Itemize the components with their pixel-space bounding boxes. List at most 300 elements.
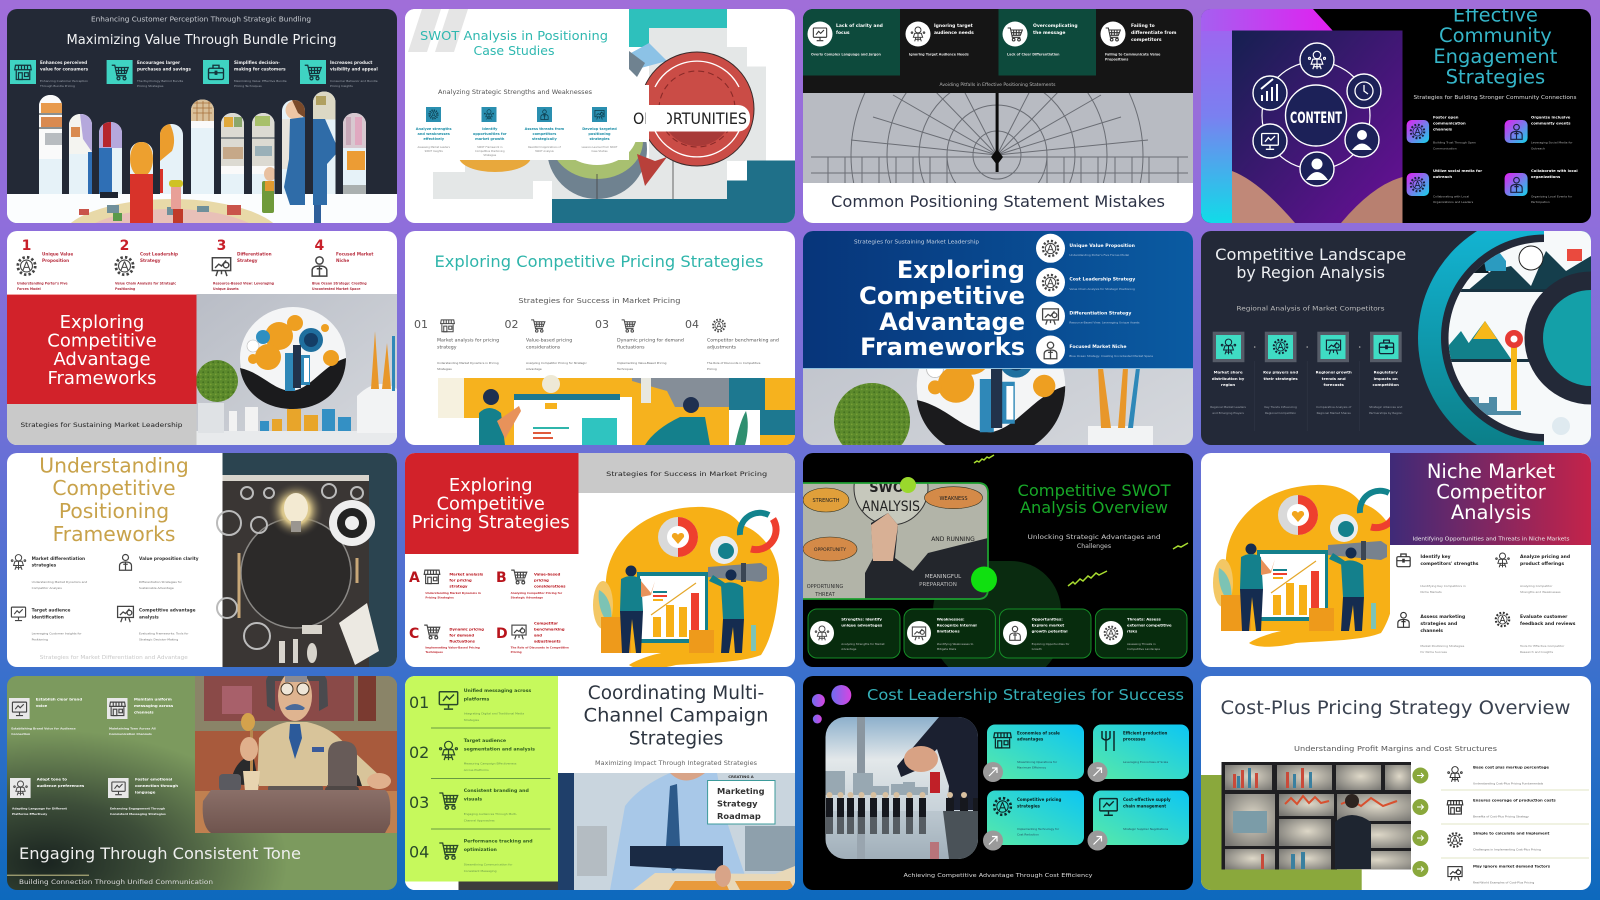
lime channel list panel: platforms — [464, 696, 490, 702]
illustration: protractor chart — [803, 93, 1193, 183]
step labels: Market analysis for pricing — [437, 338, 499, 344]
pricing captions: Implementing Value-Based Pricing — [425, 646, 480, 650]
framework labels: Cost Leadership Strategy — [1069, 276, 1135, 282]
analysis captions: Identifying Key Competitors in — [1420, 584, 1465, 588]
framework icons — [18, 257, 327, 276]
framework captions: Value Chain Analysis for Strategic Positioning — [1069, 287, 1135, 291]
four engagement items: Collaborating with Local — [1432, 194, 1469, 198]
title: Analysis Overview — [1019, 498, 1168, 517]
analysis labels: competitors' strengths — [1420, 561, 1478, 567]
region captions: and Emerging Players — [1212, 411, 1244, 415]
analysis labels: Identify key — [1420, 554, 1450, 560]
illustration: marketing roadmap photo — [558, 772, 795, 890]
title: Cost-Plus Pricing Strategy Overview — [1220, 698, 1570, 718]
illustration: SWOT photo: OPPORTUNING — [806, 584, 843, 590]
letters: C — [409, 626, 419, 642]
four strategy columns: SWOT Framework in — [477, 144, 503, 148]
region labels: Regional growth — [1315, 370, 1351, 374]
region labels: Key players and — [1263, 370, 1298, 374]
illustration: analyst facing chart wall — [1221, 762, 1410, 870]
framework captions: Leveraging Customer Insights for — [32, 632, 82, 636]
illustration: SWOT photo: MEANINGFUL — [924, 574, 962, 580]
benefit text columns: making for customers — [234, 66, 286, 71]
panel: positioning statement mistakes slide — [803, 9, 1193, 223]
four strategy columns: competitors — [533, 132, 556, 136]
subtitle: Maximizing Impact Through Integrated Strategies — [595, 760, 757, 766]
strategy cards — [982, 724, 1188, 850]
SWOT cards: external competitive — [1126, 622, 1171, 628]
SWOT cards: risks — [1126, 628, 1137, 634]
title: Engagement — [1433, 44, 1557, 68]
title block: Exploring — [449, 475, 533, 496]
analysis captions: Niche Markets — [1420, 590, 1442, 594]
framework captions: Unique Assets — [213, 287, 239, 291]
item labels — [1472, 764, 1556, 868]
item captions: Challenges in Implementing Cost-Plus Pricing — [1472, 847, 1541, 851]
step labels — [437, 338, 779, 350]
four engagement items: channels — [1432, 126, 1452, 131]
four strategy columns — [416, 106, 618, 156]
SWOT cards: Assessing Threats in — [1126, 642, 1155, 646]
step labels: Dynamic pricing for demand — [617, 338, 684, 344]
illustration: regional map ring — [1418, 231, 1591, 445]
framework labels: Unique Value Proposition — [1069, 243, 1134, 249]
four engagement items: Building Trust Through Open — [1432, 140, 1475, 144]
illustration: shoppers seen through arches — [7, 92, 397, 223]
illustration: gears disc and plant — [834, 315, 1152, 459]
opportunities pill — [632, 104, 750, 131]
subtitle: Strategies for Sustaining Market Leadership — [854, 240, 978, 246]
framework captions: Strategic Decision-Making — [139, 638, 178, 642]
benefit text columns: value for consumers — [40, 66, 89, 71]
four engagement items: Leveraging Social Media for — [1530, 140, 1573, 144]
four engagement items: Organize inclusive — [1530, 114, 1570, 119]
framework labels: Strategy — [237, 258, 258, 263]
title: Strategies — [1445, 65, 1545, 88]
title: Competitive SWOT — [1017, 481, 1170, 500]
region captions: Comparative Analysis of — [1316, 405, 1352, 409]
title: Frameworks — [860, 333, 1024, 361]
title: Community — [1438, 24, 1551, 46]
strategy cards: Implementing Technology for — [1016, 826, 1059, 830]
illustration: content cycle — [1232, 30, 1402, 223]
panel: multi-channel campaign slide — [405, 676, 795, 890]
four engagement items: outreach — [1432, 174, 1452, 178]
region captions: Regional Market Shares — [1316, 411, 1351, 415]
benefit captions: Through Bundle Pricing — [39, 84, 75, 88]
framework captions: Resource-Based View: Leveraging — [213, 282, 275, 286]
analysis labels: product offerings — [1520, 561, 1564, 567]
analysis captions: Research and Insights — [1520, 650, 1553, 654]
grey subtitle block: Strategies for Sustaining Market Leadership — [20, 421, 182, 429]
framework circles — [1036, 234, 1064, 364]
guideline captions: Maintaining Tone Across All — [109, 726, 156, 730]
strategy cards: Efficient production — [1122, 730, 1167, 735]
benefit captions: Pricing Insights — [330, 84, 353, 88]
SWOT cards: unique advantages — [841, 622, 883, 628]
strategy cards: advantages — [1016, 736, 1043, 741]
framework labels: Value proposition clarity — [139, 556, 199, 562]
subtitle — [1027, 534, 1160, 550]
title: Exploring Competitive Pricing Strategies — [434, 252, 764, 271]
subtitle block — [578, 453, 795, 493]
four engagement items: Outreach — [1530, 146, 1544, 150]
four strategy columns: Competitive Positioning — [475, 148, 505, 152]
opportunities pill: OPPORTUNITIES — [633, 108, 747, 128]
region labels: impacts on — [1373, 376, 1397, 381]
lime channel list panel: Consistent Messaging — [464, 868, 497, 872]
title: Cost Leadership Strategies for Success — [866, 686, 1184, 704]
benefit captions: Consumer Behavior and Bundle — [330, 78, 378, 82]
title: Common Positioning Statement Mistakes — [830, 192, 1164, 210]
benefit text columns: purchases and savings — [137, 66, 191, 71]
panel: SWOT case studies slide — [405, 9, 795, 223]
step captions: Strategies — [437, 367, 452, 371]
guideline labels: voice — [36, 702, 48, 708]
guideline captions: Connection — [11, 732, 30, 736]
lime channel list panel: Consistent branding and — [464, 788, 529, 794]
lime channel list panel: Integrating Digital and Traditional Media — [464, 711, 524, 715]
SWOT cards: Strengths: Identify — [841, 616, 882, 622]
analysis captions: Analyzing Competitor — [1520, 584, 1553, 588]
lime channel list panel: visuals — [464, 796, 482, 802]
region labels: region — [1221, 382, 1235, 387]
strategy cards: Competitive pricing — [1016, 796, 1061, 802]
four engagement items: Participation — [1530, 200, 1549, 204]
analysis captions — [1420, 584, 1565, 654]
strategy cards: Cost-effective supply — [1122, 796, 1170, 802]
illustration: marketing roadmap photo: Strategy — [717, 798, 758, 808]
mistake labels: focus — [836, 30, 849, 36]
four strategy columns: Assessing Market Leaders — [418, 144, 451, 148]
step captions: Pricing — [707, 367, 717, 371]
strategy cards: Strategic Supplier Negotiations — [1122, 826, 1168, 830]
title block: Competitor — [1436, 480, 1546, 504]
illustration: bulb and tools — [217, 453, 397, 667]
step numbers — [414, 318, 699, 331]
four strategy columns: Real-World Applications of — [528, 144, 561, 148]
step numbers: 03 — [595, 318, 609, 331]
title — [39, 454, 189, 546]
red title block — [7, 294, 196, 404]
illustration: marketing team — [1212, 485, 1399, 647]
title: Competitive Landscape — [1215, 245, 1406, 264]
framework captions: Evaluating Frameworks: Tools for — [139, 632, 189, 636]
title block: Niche Market — [1426, 460, 1555, 483]
pricing labels: benchmarking — [534, 626, 565, 632]
benefit captions: Maximizing Value: Effective Bundle — [234, 78, 287, 82]
analysis captions: Tools for Effective Competitor — [1518, 644, 1565, 648]
strategy cards: processes — [1122, 736, 1146, 741]
panel: competitive advantage frameworks slide (red) — [7, 231, 397, 445]
four strategy columns: SWOT Insights — [425, 148, 443, 152]
region captions: Strategic Alliances and — [1369, 405, 1402, 409]
benefit text columns: Enhances perceived — [40, 60, 87, 64]
SWOT cards: Explore market — [1031, 622, 1064, 628]
illustration: SWOT photo: AND RUNNING — [931, 536, 975, 543]
mistake columns backgrounds — [802, 8, 1096, 75]
framework labels: Differentiation — [237, 252, 272, 256]
mistake labels: the message — [1032, 30, 1065, 36]
illustration: content cycle: CONTENT — [1290, 108, 1342, 126]
analysis labels: feedback and reviews — [1520, 621, 1575, 627]
four strategy columns: Strategies — [483, 152, 497, 156]
numbers: 2 — [120, 238, 129, 254]
framework labels: Unique Value — [42, 252, 73, 256]
subtitle: Avoiding Pitfalls in Effective Positioning Statements — [939, 82, 1056, 88]
framework captions: Blue Ocean Strategy: Creating — [312, 282, 367, 286]
region labels: trends and — [1321, 376, 1345, 381]
four strategy columns: strategically — [532, 136, 557, 140]
framework labels: Focused Market Niche — [1069, 344, 1126, 350]
title block: Competitive — [437, 494, 545, 514]
pricing labels: Value-based — [534, 572, 561, 576]
framework captions: Competitor Analysis — [32, 586, 62, 590]
step labels: strategy — [437, 344, 457, 350]
four strategy columns: opportunities for — [473, 132, 507, 136]
title block: Analysis — [1450, 501, 1531, 524]
title: Engaging Through Consistent Tone — [19, 844, 301, 862]
mistake captions: Overly Complex Language and Jargon — [810, 52, 881, 56]
SWOT cards: Mitigate Risks — [936, 647, 956, 651]
mistake labels: competitors — [1130, 36, 1161, 42]
four engagement items: organizations — [1530, 174, 1560, 178]
SWOT cards: Growth — [1031, 647, 1041, 651]
region labels: Market share — [1213, 370, 1242, 374]
four engagement items — [1406, 114, 1577, 204]
mistake labels: Failing to — [1130, 22, 1154, 28]
benefit text columns: Encourages larger — [137, 60, 181, 64]
decorative quote marks — [408, 8, 468, 52]
title: Strategies — [629, 728, 723, 749]
benefit text columns: Increases product — [330, 60, 372, 64]
lime channel list panel: Channel Approaches — [464, 818, 495, 822]
title block — [405, 453, 578, 554]
panel: niche market competitor slide — [1201, 453, 1591, 667]
illustration: SWOT photo: ANALYSIS — [862, 499, 920, 515]
title block — [1390, 453, 1590, 545]
title — [420, 28, 608, 58]
item dividers — [1440, 790, 1588, 858]
four engagement items: communication — [1432, 120, 1466, 125]
four strategy columns: Analyze strengths — [416, 126, 452, 130]
mistake labels: Lack of clarity and — [836, 22, 882, 28]
strategy cards: Cost Reduction — [1016, 832, 1038, 836]
lime channel list panel: Performance tracking and — [464, 838, 533, 844]
subtitle: Unlocking Strategic Advantages and — [1027, 534, 1160, 541]
panel: competitive SWOT overview slide — [803, 453, 1193, 667]
step captions: Implementing Value-Based Pricing — [617, 361, 667, 365]
benefit captions: Enhancing Customer Perception — [40, 78, 88, 82]
framework captions: Differentiation Strategies for — [139, 580, 183, 584]
region labels: their strategies — [1263, 376, 1298, 381]
pricing labels: pricing — [534, 578, 549, 582]
framework labels: analysis — [139, 614, 159, 620]
subtitle: Strategies for Building Stronger Community Connections — [1413, 94, 1576, 100]
framework labels — [32, 556, 199, 620]
framework icons — [11, 554, 133, 622]
process arrows — [1412, 767, 1428, 876]
pricing labels: for pricing — [449, 578, 472, 582]
SWOT cards: limitations — [936, 628, 960, 634]
illustration: SWOT photo: STRENGTH — [812, 498, 839, 504]
title: by Region Analysis — [1236, 263, 1384, 282]
title: Case Studies — [474, 42, 554, 58]
SWOT cards: Threats: Assess — [1126, 616, 1161, 622]
mistake captions: Ignoring Target Audience Needs — [908, 52, 968, 56]
illustration: SWOT photo: SWOT — [869, 481, 912, 496]
guideline captions — [11, 726, 166, 816]
guideline labels: connection through — [135, 782, 178, 788]
footer subtitle: Achieving Competitive Advantage Through Cost Efficiency — [903, 872, 1093, 878]
benefit captions: Pricing Techniques — [234, 84, 262, 88]
illustration: clay speaker at podium — [195, 668, 397, 832]
panel: bundle pricing slide — [7, 9, 397, 223]
numbers: 1 — [22, 238, 31, 254]
pricing labels: fluctuations — [449, 638, 476, 644]
strategy cards: strategies — [1016, 803, 1040, 808]
mistake captions: Propositions — [1104, 57, 1128, 61]
illustration: marketing team — [593, 507, 779, 669]
item captions: Benefits of Cost-Plus Pricing Strategy — [1472, 814, 1529, 818]
step labels: fluctuations — [617, 344, 645, 350]
lime channel list panel: Target audience — [464, 738, 506, 744]
analysis labels: Assess marketing — [1420, 614, 1465, 620]
SWOT cards: Analyzing Strengths for Market — [841, 642, 885, 646]
framework labels — [42, 252, 373, 263]
SWOT cards: Identifying Weaknesses to — [936, 642, 973, 646]
guideline labels: Establish clear brand — [36, 696, 82, 701]
four strategy columns: Lessons Learned from SWOT — [582, 144, 618, 148]
subtitle: Challenges — [1076, 543, 1111, 550]
SWOT cards: Opportunities: — [1031, 616, 1063, 622]
framework captions — [1069, 253, 1153, 358]
region captions: Regional Competition — [1265, 411, 1296, 415]
analysis captions: Market Positioning Strategies — [1420, 644, 1464, 648]
zigzag accents — [974, 455, 1188, 586]
panel: cost-plus pricing slide — [1201, 676, 1591, 890]
decorative green blob — [932, 561, 1060, 681]
speaking guideline icons — [9, 698, 129, 798]
pricing labels: Market analysis — [449, 572, 484, 576]
step numbers: 01 — [414, 318, 428, 331]
four strategy columns: Assess threats from — [525, 126, 565, 130]
lime channel list panel: Strategies — [464, 718, 479, 722]
mistake icons — [807, 21, 1125, 46]
pricing captions: The Role of Discounts in Competitive — [511, 646, 569, 650]
slide title: Maximizing Value Through Bundle Pricing — [66, 32, 336, 48]
SWOT cards: Recognize internal — [936, 622, 976, 628]
region labels: Regulatory — [1373, 370, 1398, 374]
title: SWOT Analysis in Positioning — [420, 28, 608, 42]
four strategy columns: Develop targeted — [582, 126, 617, 130]
red title block: Advantage — [53, 349, 151, 370]
illustration: SWOT photo: WEAKNESS — [939, 496, 967, 502]
illustration: SWOT photo: OPPORTUNITY — [813, 547, 846, 553]
red title block: Frameworks — [47, 368, 157, 389]
icon row — [10, 60, 326, 84]
four engagement items: Communication — [1432, 146, 1456, 150]
panel: consistent tone slide — [7, 676, 397, 890]
analysis labels: strategies and — [1420, 621, 1457, 627]
SWOT cards: growth potential — [1031, 628, 1067, 634]
letters: B — [496, 570, 507, 586]
pricing captions: Strategic Advantage — [511, 596, 543, 600]
panel: competitive pricing strategies slide (teal) — [405, 231, 795, 445]
step labels: Value-based pricing — [526, 338, 572, 344]
framework labels: Proposition — [42, 258, 69, 263]
region captions: Regional Market Leaders — [1210, 405, 1246, 409]
item captions: Real-World Examples of Cost-Plus Pricing — [1472, 880, 1534, 884]
item captions — [1472, 781, 1543, 884]
four engagement items: Collaborate with local — [1530, 168, 1577, 172]
region captions: Key Trends Influencing — [1264, 405, 1297, 409]
title: Competitive — [858, 282, 1024, 310]
step icons — [441, 320, 725, 332]
framework labels: Market differentiation — [32, 556, 85, 562]
letters: A — [409, 570, 420, 586]
step numbers: 04 — [685, 318, 699, 331]
pricing captions: Techniques — [425, 650, 443, 654]
analysis labels: channels — [1420, 628, 1443, 634]
illustration: marketing roadmap photo: Marketing — [717, 786, 765, 796]
item labels: Base cost plus markup percentage — [1472, 764, 1549, 769]
step captions: Understanding Market Dynamics in Pricing — [437, 361, 499, 365]
numbers: 4 — [315, 238, 325, 254]
decorative circles — [811, 684, 851, 723]
analysis labels: Evaluate customer — [1520, 614, 1568, 620]
step numbers: 02 — [504, 318, 518, 331]
mistake labels: Overcomplicating — [1032, 22, 1077, 28]
four strategy columns: SWOT Analysis — [535, 148, 554, 152]
analysis captions: Strengths and Weaknesses — [1520, 590, 1561, 594]
title block: Pricing Strategies — [412, 512, 570, 533]
lime channel list panel: optimization — [464, 846, 497, 852]
title: Positioning — [59, 499, 169, 523]
subtitle block: Strategies for Success in Market Pricing — [606, 470, 767, 478]
subtitle: Understanding Profit Margins and Cost Structures — [1294, 744, 1497, 752]
footer subtitle: Strategies for Market Differentiation and Advantage — [40, 655, 188, 661]
region labels: forecasts — [1323, 382, 1344, 387]
analysis captions: for Niche Success — [1420, 650, 1447, 654]
title — [584, 682, 768, 749]
grey subtitle block — [7, 404, 196, 445]
title: Channel Campaign — [584, 705, 768, 726]
red title block: Competitive — [47, 330, 157, 352]
framework labels: strategies — [32, 562, 57, 568]
framework captions: Forces Model — [17, 287, 41, 291]
slide subtitle: Enhancing Customer Perception Through Strategic Bundling — [91, 14, 311, 23]
four strategy columns: effectively — [423, 136, 445, 140]
four engagement items: Organizations and Leaders — [1432, 200, 1473, 204]
subtitle: Building Connection Through Unified Communication — [19, 878, 213, 886]
panel: community engagement slide — [1201, 8, 1591, 223]
framework captions: Understanding Porter's Five Forces Model — [1069, 253, 1129, 257]
title: Exploring — [896, 256, 1024, 284]
numbers: 3 — [217, 238, 226, 254]
lime channel list panel: Unified messaging across — [464, 688, 531, 694]
illustration: marketing team — [438, 375, 795, 445]
four strategy columns: and weaknesses — [418, 132, 450, 136]
pricing labels: considerations — [534, 584, 566, 588]
framework captions: Resource-Based View: Leveraging Unique Assets — [1069, 320, 1140, 324]
subtitle: Regional Analysis of Market Competitors — [1236, 304, 1385, 312]
guideline labels: language — [135, 789, 156, 794]
item labels: Simple to calculate and implement — [1472, 830, 1549, 835]
guideline labels: Foster emotional — [135, 776, 172, 781]
title: Frameworks — [53, 522, 175, 546]
lime channel list panel: Across Platforms — [464, 768, 489, 772]
